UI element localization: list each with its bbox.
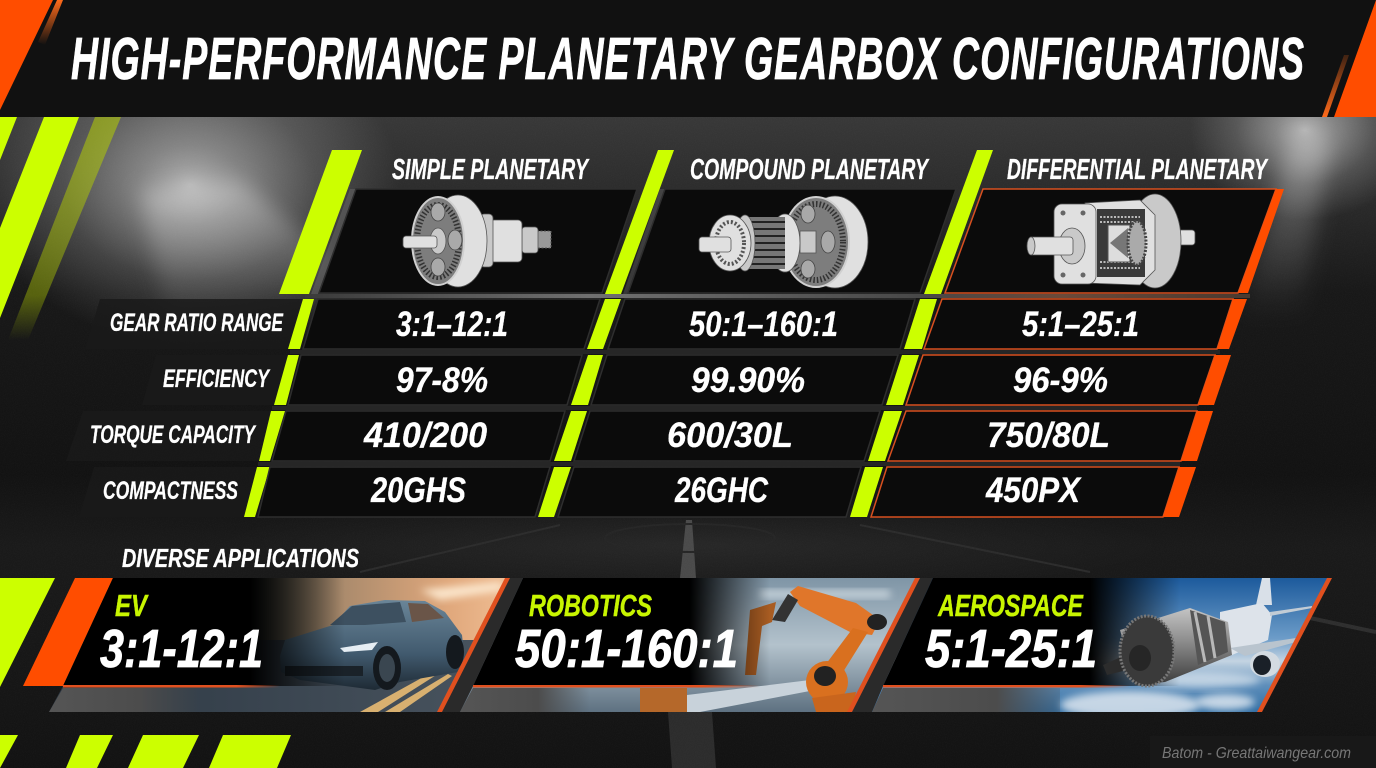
column 1 header: simple planetary: SIMPLE PLANETARY [392,154,590,186]
row: gear ratio range: 5:1–25:1 [1022,305,1139,344]
application card: aerospace [872,578,1342,719]
row: efficiency [142,355,1231,405]
row: torque capacity [66,411,1213,461]
application card: aerospace: 5:1-25:1 [925,619,1097,679]
row: compactness: 450PX [985,471,1082,510]
row: compactness: 26GHC [674,471,769,510]
illustration: car [280,600,465,690]
row: compactness: COMPACTNESS [103,477,238,505]
illustration: airplane [1220,578,1312,677]
illustration: aerospace gearbox [1103,608,1232,686]
row: efficiency: 97-8% [396,361,488,400]
icon: differential planetary gearbox [1027,194,1195,288]
application card: EV: EV [115,588,149,623]
corner accent: left orange [0,0,63,110]
footer credit [1150,736,1376,768]
row: torque capacity: 410/200 [363,416,488,455]
row: gear ratio range [85,299,1247,349]
footer credit: Batom - Greattaiwangear.com [1162,745,1351,762]
icon: simple planetary gearbox [403,195,551,287]
section heading: DIVERSE APPLICATIONS [122,543,359,573]
row: gear ratio range: 50:1–160:1 [689,305,838,344]
application card: robotics: 50:1-160:1 [515,619,738,679]
header band [0,0,1376,117]
application card: EV [23,578,523,712]
row: gear ratio range: GEAR RATIO RANGE [110,309,284,337]
left lime block [0,578,55,687]
row: efficiency: 96-9% [1013,361,1108,400]
icon: compound planetary gearbox [699,196,868,288]
row: torque capacity: TORQUE CAPACITY [90,421,257,449]
row: compactness [79,467,1196,517]
column 2 header: compound planetary [605,150,956,294]
bottom lime stripes [0,735,291,768]
column 2 header: compound planetary: COMPOUND PLANETARY [690,154,930,186]
corner accent: right orange [1322,0,1376,117]
separators between rows [258,294,1250,466]
row: torque capacity: 600/30L [667,416,793,455]
application card: EV: 3:1-12:1 [100,619,263,679]
row: compactness: 20GHS [370,471,466,510]
application card: robotics [460,578,933,712]
left lime stripes [0,117,121,340]
illustration: robot arm [745,586,887,712]
column 1 header: simple planetary [279,150,637,294]
row: gear ratio range: 3:1–12:1 [396,305,508,344]
row: torque capacity: 750/80L [987,416,1110,455]
row: efficiency: 99.90% [691,361,805,400]
column 3 header: differential planetary [924,150,1284,294]
application card: aerospace: AEROSPACE [937,588,1084,623]
application card: robotics: ROBOTICS [529,588,652,623]
row: efficiency: EFFICIENCY [163,365,271,393]
